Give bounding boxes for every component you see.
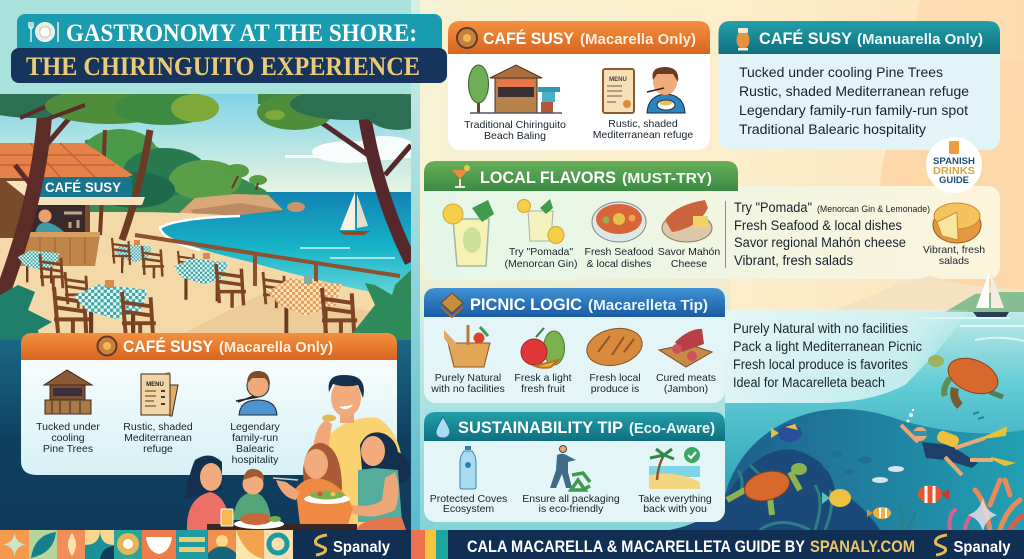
- icon: hut: [44, 370, 92, 414]
- icon: bread: [583, 324, 646, 370]
- panel: local flavors: [424, 161, 1000, 279]
- label: Fresh local: [589, 372, 641, 384]
- text list: picnic: Pack a light Mediterranean Picnic: [733, 339, 922, 354]
- title banner bottom: THE CHIRINGUITO EXPERIENCE: [26, 51, 420, 81]
- sea: [162, 192, 411, 295]
- canopy left: [0, 94, 219, 125]
- logo: spanaly left: [315, 535, 390, 556]
- label: cooling: [51, 432, 85, 444]
- text list: Rustic, shaded Mediterranean refuge: [739, 83, 969, 99]
- label: Try "Pomada": [509, 246, 573, 258]
- panel heading: (Macarella Only): [580, 32, 696, 48]
- blue fish: [771, 424, 802, 442]
- divider: [724, 201, 726, 268]
- cafe hut: [0, 143, 145, 266]
- sand shadows: [184, 291, 370, 333]
- foreground foliage: [0, 270, 411, 344]
- label: (Jambon): [664, 383, 708, 395]
- label: Tucked under: [36, 421, 100, 433]
- panel heading: SUSTAINABILITY TIP: [458, 418, 623, 437]
- icon: sandwich: [441, 293, 463, 317]
- panel heading: (Manuarella Only): [857, 32, 983, 48]
- label: Protected Coves: [430, 493, 507, 505]
- label: fresh fruit: [521, 383, 565, 395]
- icon: menu: [141, 372, 178, 416]
- text list: Fresh Seafood & local dishes: [734, 218, 902, 233]
- icon: tree and kiosk: [468, 65, 562, 113]
- label: Cheese: [671, 258, 707, 270]
- table plants: [105, 240, 312, 288]
- cafe sign: [36, 177, 132, 197]
- panel heading: (Macarelleta Tip): [588, 298, 708, 314]
- label: Traditional Chiringuito: [464, 119, 566, 131]
- panel: picnic logic: [424, 288, 725, 403]
- girl with fork: [273, 443, 353, 525]
- label: Ecosystem: [443, 503, 494, 515]
- decorative tile strip: [0, 530, 1024, 559]
- logo: spanaly right: Spanaly: [954, 539, 1011, 556]
- text list: Legendary family-run family-run spot: [739, 102, 968, 118]
- footer text: CALA MACARELLA & MACARELLETA GUIDE BY: [467, 537, 806, 556]
- label: Take everything: [638, 493, 712, 505]
- panel heading: (MUST-TRY): [622, 170, 712, 187]
- label: Legendary: [230, 421, 281, 433]
- text list: Traditional Balearic hospitality: [739, 121, 926, 137]
- icon: menu: [603, 69, 634, 113]
- bar counter: [20, 235, 100, 266]
- icon: wheel: [98, 336, 116, 356]
- icon: amber jar: [736, 28, 750, 50]
- dining tables: [18, 238, 357, 342]
- text list: Vibrant, fresh salads: [734, 253, 853, 268]
- label: back with you: [643, 503, 707, 515]
- icon: basket: [444, 325, 490, 367]
- icon: person recycling: [550, 446, 590, 490]
- table with food: [207, 509, 357, 530]
- icon: fruit: [521, 328, 564, 368]
- panel heading: CAFÉ SUSY: [483, 29, 575, 48]
- sea turtle upper: [928, 351, 1003, 406]
- label: Rustic, shaded: [608, 118, 678, 130]
- seascape: [670, 272, 1024, 530]
- yellow fish: [822, 489, 851, 507]
- panel: cafe susy manuarella: [718, 21, 1000, 150]
- coral: [950, 480, 1024, 530]
- diver: [901, 425, 1012, 475]
- seabed: [670, 409, 1024, 530]
- sailboat: [973, 272, 1009, 317]
- label: family-run: [232, 432, 278, 444]
- panel heading: CAFÉ SUSY: [759, 29, 853, 48]
- sparkle: [968, 498, 997, 532]
- icon: clean beach: [649, 447, 700, 489]
- panel heading: (Macarella Only): [219, 340, 333, 356]
- boy: [233, 469, 271, 520]
- label: Pine Trees: [43, 443, 93, 455]
- icon: wheel: [457, 28, 477, 48]
- woman: [350, 432, 410, 530]
- label: Purely Natural: [435, 372, 501, 384]
- canopy right: [257, 94, 411, 130]
- back trees: [100, 130, 150, 240]
- text list: picnic: Purely Natural with no facilities: [733, 321, 908, 336]
- icon: cocktail: [452, 165, 470, 187]
- small fish school: [823, 412, 984, 483]
- man: [313, 375, 402, 530]
- text list: Savor regional Mahón cheese: [734, 235, 906, 250]
- label: Cured meats: [656, 372, 716, 384]
- footer text: SPANALY.COM: [810, 537, 915, 556]
- label: (Menorcan Gin): [505, 258, 577, 270]
- bartender: [36, 210, 64, 232]
- panel heading: CAFÉ SUSY: [123, 337, 214, 356]
- air bubbles: [906, 409, 914, 422]
- rocks: [178, 194, 305, 215]
- icon: cured meat board: [659, 329, 712, 367]
- label: Ensure all packaging: [522, 493, 620, 505]
- kelp and reef plants: [738, 465, 915, 530]
- badge: spanish drinks guide: DRINKS: [933, 166, 975, 177]
- icon: lemonade glass: [443, 200, 494, 266]
- green headland: [82, 129, 285, 215]
- label: & local dishes: [587, 258, 651, 270]
- panel: sustainability tip: [424, 412, 725, 522]
- icon: plate and cutlery: [29, 22, 58, 42]
- icon: water drop: [436, 417, 450, 438]
- panel heading: LOCAL FLAVORS: [480, 168, 616, 187]
- label: Fresh Seafood: [585, 246, 654, 258]
- sea turtle lower: [727, 463, 807, 515]
- icon: menu: MENU: [609, 77, 627, 83]
- label: Vibrant, fresh: [923, 244, 985, 256]
- label: Savor Mahón: [658, 246, 720, 258]
- icon: pomada glass: [518, 199, 564, 244]
- sea surface: [725, 312, 1024, 530]
- label: produce is: [591, 383, 639, 395]
- pale text backdrop: picnic list: [725, 310, 970, 403]
- right tree trunk: [362, 100, 411, 262]
- label: Balearic: [236, 443, 274, 455]
- cloud: [285, 136, 415, 163]
- icon: cheese plate: [662, 200, 712, 242]
- text list: (Menorcan Gin & Lemonade): [817, 204, 930, 214]
- left trunk: [0, 105, 45, 300]
- sand: [0, 212, 375, 333]
- girl left: [184, 455, 231, 530]
- title banner top: GASTRONOMY AT THE SHORE:: [66, 20, 417, 47]
- label: Mediterranean: [124, 432, 192, 444]
- title: [11, 14, 447, 83]
- icon: person eating: [647, 67, 685, 113]
- badge: spanish drinks guide: GUIDE: [939, 175, 969, 185]
- text list: Try "Pomada": [734, 200, 812, 215]
- family illustration: [184, 375, 410, 530]
- cafe sign: CAFÉ SUSY: [45, 180, 121, 195]
- clown fish: [918, 485, 949, 503]
- label: Rustic, shaded: [123, 421, 193, 433]
- striped fish: [867, 507, 891, 519]
- icon: menu: MENU: [146, 382, 164, 388]
- text list: Tucked under cooling Pine Trees: [739, 64, 943, 80]
- text list: picnic: [733, 321, 922, 390]
- distant hills: [830, 276, 1024, 315]
- label: salads: [939, 255, 969, 267]
- label: is eco-friendly: [539, 503, 604, 515]
- sea life: [727, 351, 1024, 532]
- label: refuge: [143, 443, 173, 455]
- icon: water bottle: [460, 446, 476, 489]
- text list: [734, 200, 930, 268]
- text list: picnic: Ideal for Macarelleta beach: [733, 375, 885, 390]
- label: Beach Baling: [484, 130, 546, 142]
- text list: picnic: Fresh local produce is favorites: [733, 357, 908, 372]
- icon: seafood plate: [592, 202, 646, 242]
- badge: spanish drinks guide: SPANISH: [933, 156, 975, 166]
- panel heading: (Eco-Aware): [629, 421, 715, 437]
- label: Fresk a light: [514, 372, 572, 384]
- icon: cheese wheel: [933, 203, 981, 243]
- beach scene illustration: [0, 86, 430, 344]
- title banner top: [17, 14, 442, 54]
- railing: [135, 235, 400, 286]
- label: with no facilities: [430, 383, 505, 395]
- panel heading: PICNIC LOGIC: [470, 295, 582, 314]
- sailboat: [339, 192, 370, 235]
- badge: spanish drinks guide: [926, 137, 982, 193]
- panel: cafe susy left: [21, 333, 397, 475]
- icon: person eating: [236, 371, 277, 415]
- logo: spanaly left: Spanaly: [333, 539, 390, 556]
- label: hospitality: [232, 454, 279, 466]
- label: Mediterranean refuge: [593, 129, 693, 141]
- logo: spanaly right: [935, 535, 1011, 556]
- panel: cafe susy macarella: [448, 21, 710, 150]
